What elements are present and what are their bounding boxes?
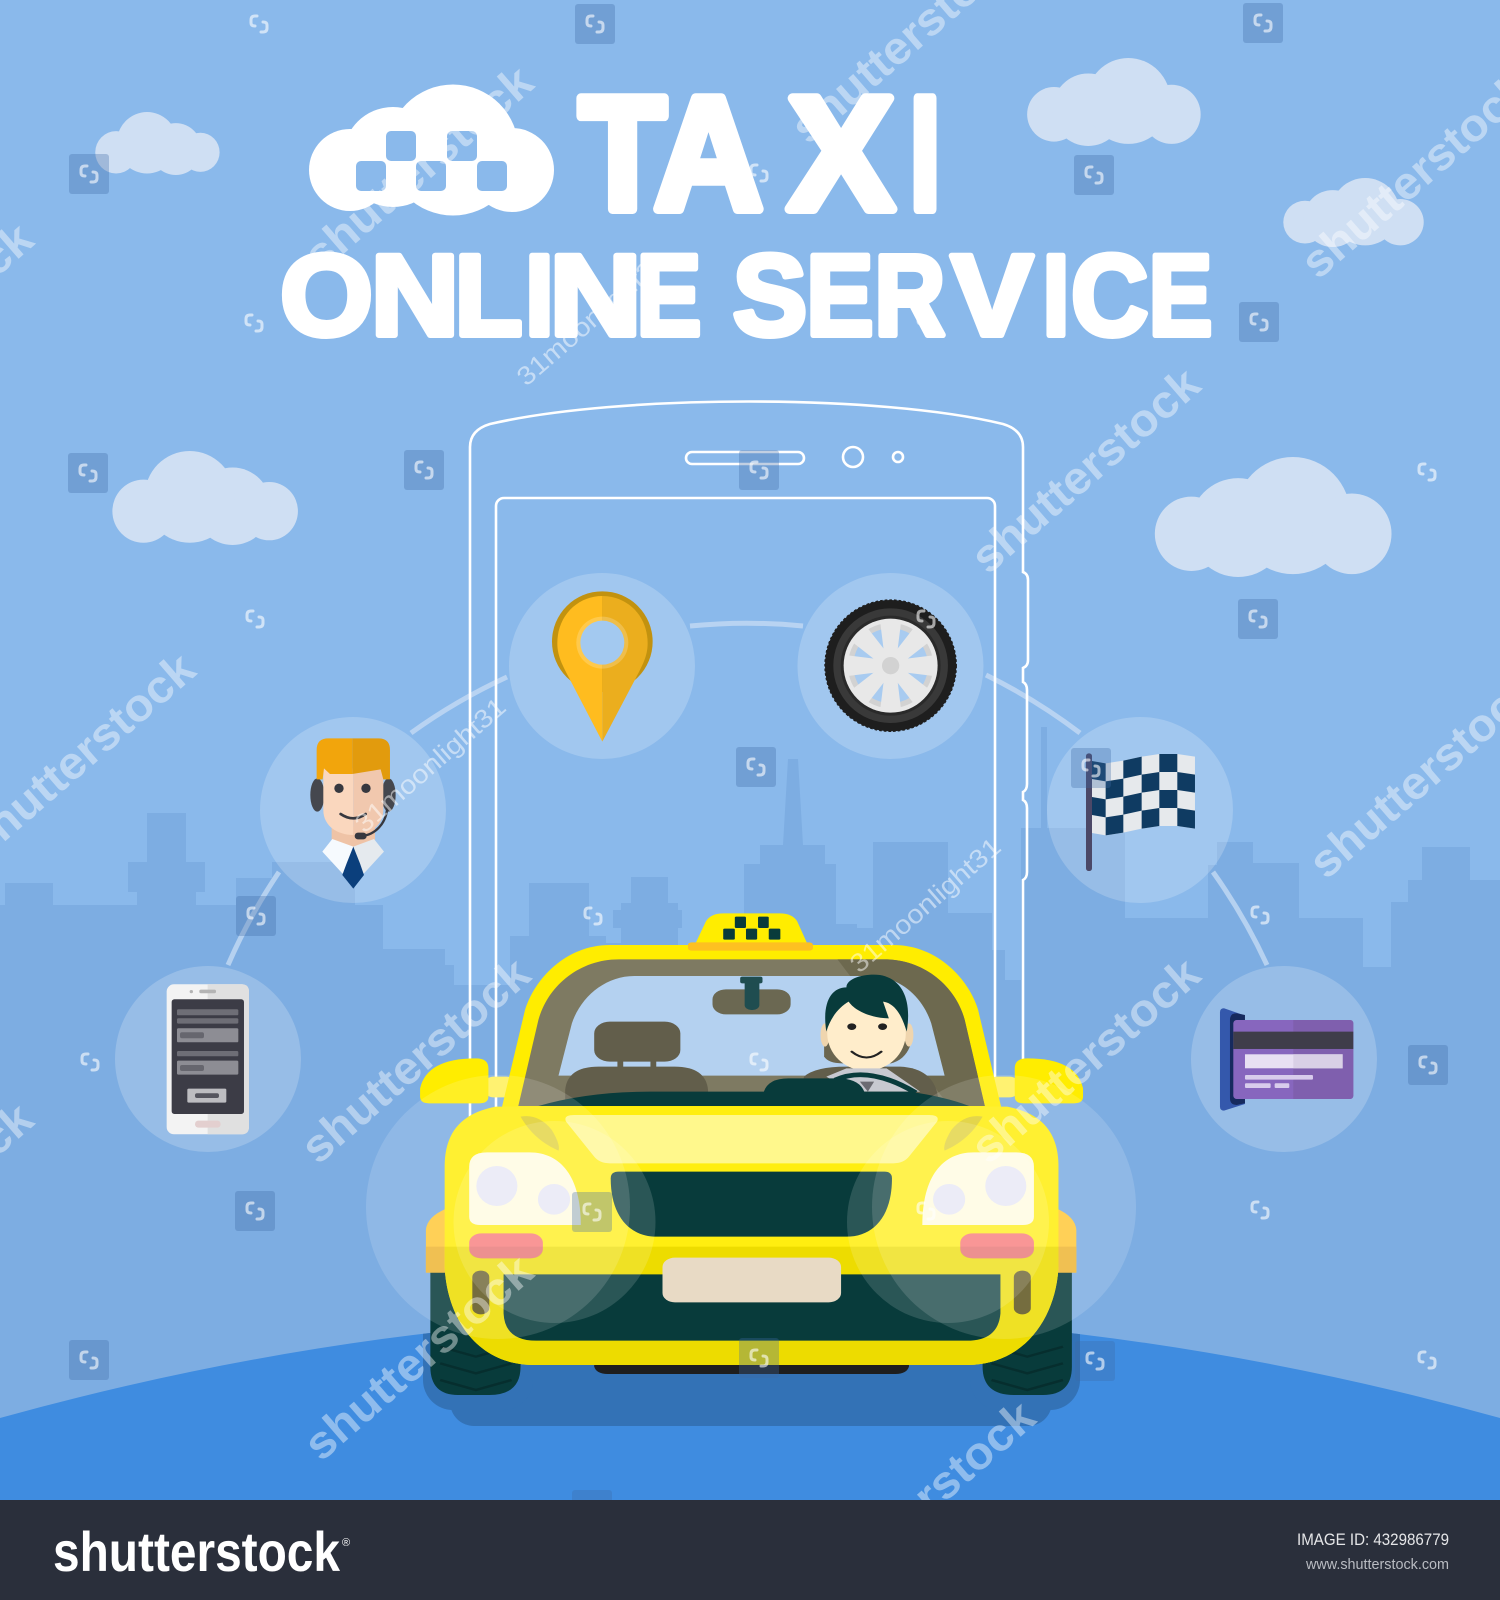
wheels — [430, 1267, 1072, 1395]
car shadow — [423, 1333, 1080, 1426]
title line two: ONLINE SERVICE: E — [1149, 232, 1212, 360]
watermark: shutterstock text: shutterstock — [293, 1244, 543, 1470]
cloud top left — [95, 112, 220, 175]
icon: bank card in reader — [1220, 1008, 1353, 1111]
cloud far right — [1283, 178, 1424, 247]
footer registered mark: ® — [342, 1537, 350, 1549]
cloud top right — [1027, 58, 1201, 146]
translucent circles over car — [366, 1075, 1136, 1339]
watermark: contributor name — [348, 244, 1007, 979]
hood highlight — [565, 1115, 938, 1163]
title logo cloud with taxi checker — [309, 84, 554, 216]
passenger seat — [565, 1022, 708, 1100]
watermark: contributor name: 31moonlight31 — [348, 691, 512, 839]
title line two: ONLINE SERVICE: V — [951, 232, 1033, 360]
title line two: ONLINE SERVICE: E — [806, 232, 874, 360]
title line two: ONLINE SERVICE: E — [636, 232, 701, 360]
title line two: ONLINE SERVICE: S — [733, 232, 807, 360]
title line two: ONLINE SERVICE: I — [525, 232, 554, 360]
footer url: www.shutterstock.com — [1305, 1556, 1449, 1573]
cloud middle left — [112, 451, 298, 545]
licence plate — [663, 1258, 841, 1302]
footer image id: IMAGE ID: 432986779 — [1297, 1530, 1449, 1549]
footer bar — [0, 1500, 1500, 1600]
watermark: shutterstock text: shutterstock — [960, 947, 1210, 1173]
smartphone outline — [470, 402, 1028, 1138]
side mirrors — [420, 1058, 1083, 1103]
rear-view mirror — [713, 977, 791, 1014]
fog vents — [472, 1271, 1031, 1314]
ground hill — [0, 1314, 1500, 1500]
title line one: TAXI: A — [654, 64, 763, 244]
windshield — [558, 976, 945, 1076]
grille — [611, 1172, 892, 1237]
title line two: ONLINE SERVICE: I — [1042, 232, 1070, 360]
title line two: ONLINE SERVICE: N — [371, 232, 459, 360]
side wings — [426, 1208, 1076, 1273]
title line one: TAXI: T — [579, 64, 666, 244]
service circles — [115, 573, 1377, 1152]
taxi car — [420, 913, 1083, 1395]
icon: car wheel — [825, 600, 956, 731]
connecting arcs between service icons — [228, 623, 1267, 965]
title line two: ONLINE SERVICE: R — [874, 232, 945, 360]
body — [445, 1107, 1058, 1365]
watermark: contributor name: 31moonlight31 — [510, 244, 674, 392]
headlights — [469, 1152, 1034, 1225]
watermark: shutterstock text: shutterstock — [960, 357, 1210, 583]
title line two: ONLINE SERVICE: C — [1071, 232, 1148, 360]
cloud middle right — [1155, 457, 1392, 577]
icon: location pin — [552, 591, 653, 742]
watermark: contributor name: 31moonlight31 — [843, 831, 1007, 979]
lower body band — [440, 1247, 1065, 1367]
red lights — [469, 1233, 1034, 1258]
watermark: shutterstock text: shutterstock — [293, 55, 543, 281]
city skyline — [0, 727, 1500, 1500]
title line one: TAXI: X — [788, 64, 894, 244]
footer logo: shutterstock — [53, 1520, 341, 1583]
icon: call-centre agent — [310, 738, 396, 889]
title line two: ONLINE SERVICE: L — [455, 232, 522, 360]
dashboard — [538, 1078, 969, 1106]
window frame — [518, 959, 985, 1106]
cabin — [500, 945, 1003, 1113]
title line one: TAXI: I — [910, 64, 940, 244]
roof sign — [696, 913, 807, 943]
title line two: ONLINE SERVICE: N — [550, 232, 642, 360]
hood creases — [521, 1116, 983, 1151]
lower intake — [504, 1274, 1000, 1341]
title line two: ONLINE SERVICE: O — [280, 232, 373, 360]
clouds — [95, 58, 1424, 577]
undercarriage — [594, 1363, 909, 1374]
icon: mobile phone with app — [167, 984, 249, 1134]
driver — [800, 975, 938, 1100]
watermark: shutterstock text: shutterstock — [290, 947, 540, 1173]
icon: checkered flag — [1086, 753, 1195, 871]
